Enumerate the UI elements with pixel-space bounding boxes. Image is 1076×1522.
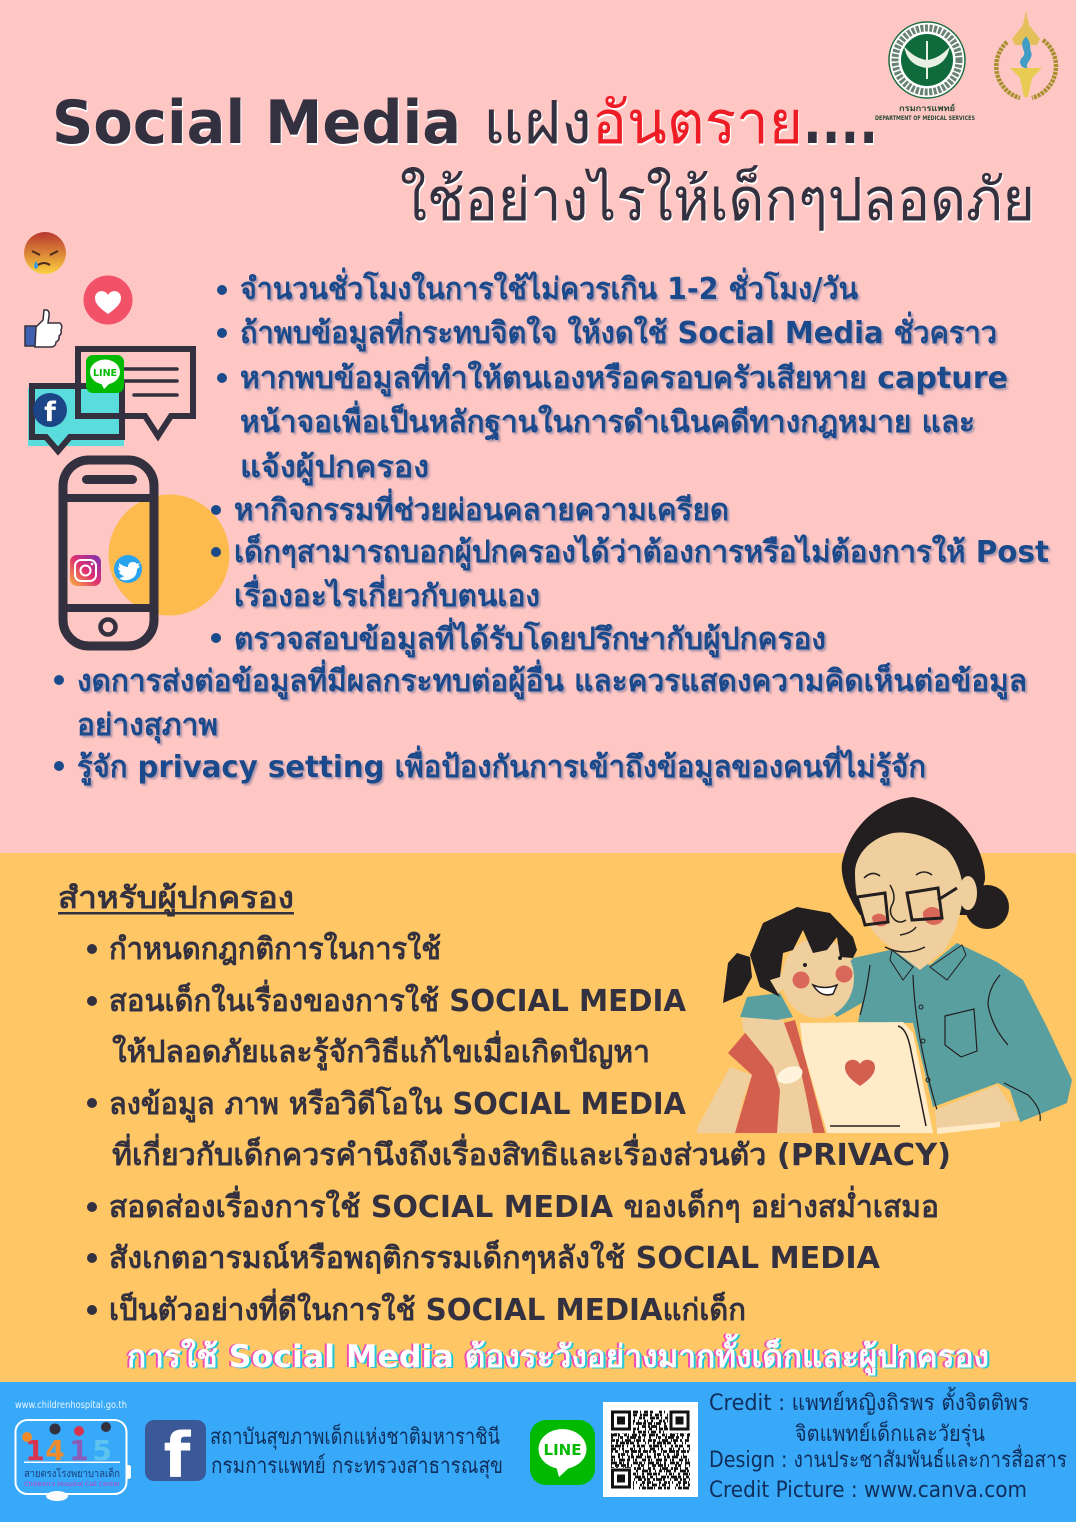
logo: Ministry of Public Health: กรมการแพทย์: [899, 103, 955, 113]
text block: parent guidance: ให้ปลอดภัยและรู้จักวิธีแก้ไขเมื่อเกิดปัญหา: [112, 1030, 650, 1071]
laptop: [800, 1022, 933, 1133]
text block: parent guidance: สอนเด็กในเรื่องของการใช้ SOCIAL MEDIA: [109, 979, 687, 1019]
title line 1: [52, 88, 878, 158]
callout: warning slogan: การใช้ Social Media ต้องระวังอย่างมากทั้งเด็กและผู้ปกครอง: [127, 1333, 989, 1376]
child head: [768, 972, 786, 992]
icon: LINE in bubble: [86, 355, 124, 393]
icon: angry crying face: [24, 232, 66, 274]
panel: orange parents background: [0, 853, 1076, 1383]
icon: LINE square: [530, 1420, 595, 1485]
icon: chat bubbles: [28, 349, 193, 451]
website address: www.childrenhospital.go.th: [15, 1400, 127, 1411]
logo: royal emblem: [996, 11, 1056, 98]
woman shirt: [820, 943, 1072, 1122]
icon: Facebook circle: f: [44, 397, 56, 428]
text block: parent guidance: เป็นตัวอย่างที่ดีในการใช้ SOCIAL MEDIAแก่เด็ก: [109, 1288, 746, 1328]
footer: institute name: [210, 1422, 503, 1479]
logo: Ministry of Public Health: DEPARTMENT OF MEDICAL SERVICES: [875, 115, 975, 122]
logo: Ministry of Public Health: [875, 22, 975, 122]
logo: 1415 call center: 4: [45, 1434, 65, 1467]
footer: credits: [709, 1387, 1067, 1503]
footer: credits: จิตแพทย์เด็กและวัยรุ่น: [795, 1419, 985, 1447]
title line 1: อันตราย: [592, 88, 803, 157]
text block: parent guidance: ที่เกี่ยวกับเด็กควรคำนึงถึงเรื่องสิทธิและเรื่องส่วนตัว (PRIVACY): [112, 1133, 951, 1173]
woman face and neck: [855, 833, 963, 970]
title line 2: ใช้อย่างไรให้เด็กๆปลอดภัย: [400, 165, 1035, 234]
text block: parent guidance: สังเกตอารมณ์หรือพฤติกรรมเด็กๆหลังใช้ SOCIAL MEDIA: [109, 1239, 881, 1276]
text block: parent guidance: สอดส่องเรื่องการใช้ SOCIAL MEDIA ของเด็กๆ อย่างสม่ำเสมอ: [109, 1185, 939, 1225]
icon: smartphone: [62, 460, 154, 646]
text block: safety tips for children: หากิจกรรมที่ช่วยผ่อนคลายความเครียด: [234, 488, 729, 528]
icon: thumbs up: [25, 310, 62, 347]
text block: safety tips for children: เรื่องอะไรเกี่ยวกับตนเอง: [234, 574, 540, 614]
icon: LINE square: LINE: [544, 1441, 581, 1459]
logo: 1415 call center: สายตรงโรงพยาบาลเด็ก: [24, 1466, 120, 1480]
icon: heart reaction: [84, 276, 132, 324]
heading: for parents: สำหรับผู้ปกครอง: [58, 881, 294, 917]
text block: safety tips for children: ตรวจสอบข้อมูลที่ได้รับโดยปรึกษากับผู้ปกครอง: [234, 617, 826, 658]
illustration: mother and child with laptop: [697, 797, 1072, 1134]
text block: safety tips for children: อย่างสุภาพ: [77, 708, 218, 744]
icon: Facebook circle: [33, 393, 67, 428]
child shirt and arms: [728, 1020, 825, 1133]
woman hair and bun: [842, 797, 985, 915]
footer: credits: Credit Picture : www.canva.com: [709, 1478, 1027, 1503]
text block: safety tips for children: [54, 267, 1049, 786]
QR code: [603, 1402, 698, 1497]
title line 1: Social Media: [52, 88, 461, 158]
icon: Instagram: [70, 555, 101, 586]
title line 1: แฝง: [483, 88, 592, 157]
panel: pink top background: [0, 0, 1076, 853]
logo: 1415 call center: 5: [92, 1434, 112, 1467]
text block: safety tips for children: หน้าจอเพื่อเป็นหลักฐานในการดำเนินคดีทางกฎหมาย และ: [240, 400, 975, 442]
text block: safety tips for children: ถ้าพบข้อมูลที่กระทบจิตใจ ให้งดใช้ Social Media ชั่วคราว: [240, 311, 997, 352]
text block: safety tips for children: จำนวนชั่วโมงในการใช้ไม่ควรเกิน 1-2 ชั่วโมง/วัน: [240, 267, 858, 307]
title line 1: ....: [803, 88, 878, 158]
text block: parent guidance: กำหนดกฎกติการในการใช้: [109, 931, 441, 967]
footer: credits: Credit : แพทย์หญิงถิรพร ตั้งจิตติพร: [709, 1387, 1029, 1416]
icon: Facebook square: [145, 1419, 206, 1492]
text block: safety tips for children: เด็กๆสามารถบอกผู้ปกครองได้ว่าต้องการหรือไม่ต้องการให้ Post: [234, 533, 1049, 571]
decorative orange circle: [108, 494, 230, 616]
logo: 1415 call center: Children's Hospital Call Center: [24, 1481, 121, 1488]
text block: safety tips for children: แจ้งผู้ปกครอง: [240, 450, 429, 486]
woman hand: [935, 1085, 1020, 1133]
text block: safety tips for children: รู้จัก privacy setting เพื่อป้องกันการเข้าถึงข้อมูลของคนที่ไม่รู้จัก: [77, 745, 926, 786]
footer: institute name: กรมการแพทย์ กระทรวงสาธารณสุข: [211, 1454, 503, 1479]
logo: 1415 call center: [16, 1420, 131, 1501]
panel: blue footer background: [0, 1382, 1076, 1522]
footer: institute name: สถาบันสุขภาพเด็กแห่งชาติมหาราชินี: [210, 1422, 500, 1450]
text block: safety tips for children: งดการส่งต่อข้อมูลที่มีผลกระทบต่อผู้อื่น และควรแสดงความคิดเห็นต่อข้อมูล: [77, 659, 1027, 700]
icon: Facebook square: f: [164, 1419, 192, 1492]
icon: LINE in bubble: LINE: [93, 368, 117, 379]
logo: 1415 call center: 1: [69, 1434, 89, 1467]
text block: parent guidance: [87, 931, 951, 1328]
text block: parent guidance: ลงข้อมูล ภาพ หรือวิดีโอใน SOCIAL MEDIA: [109, 1085, 687, 1123]
text block: safety tips for children: หากพบข้อมูลที่ทำให้ตนเองหรือครอบครัวเสียหาย capture: [240, 356, 1008, 397]
icon: Twitter: [114, 555, 142, 583]
logo: 1415 call center: 1: [25, 1434, 45, 1467]
